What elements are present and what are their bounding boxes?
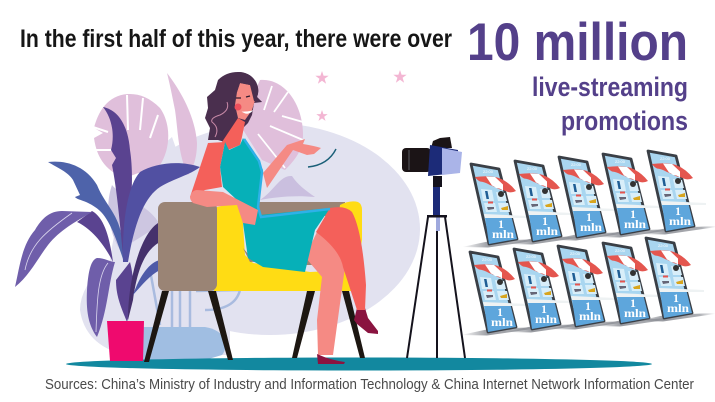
star	[393, 70, 407, 83]
phone: 1	[498, 219, 504, 231]
forearm	[190, 190, 258, 225]
phone: 22:00	[527, 166, 538, 171]
pink fan leaf left	[94, 94, 168, 178]
phone: 1	[585, 301, 591, 313]
pale blue base	[143, 327, 226, 360]
stars	[315, 70, 407, 121]
smile	[243, 111, 252, 113]
phone: mln	[624, 219, 647, 231]
seat shadow strip	[243, 248, 325, 265]
phone: 22:00	[526, 254, 537, 259]
pale stems and leaves under chair	[150, 270, 240, 327]
chair legs	[144, 291, 365, 362]
right arm yellow	[330, 201, 362, 291]
cheek	[234, 104, 242, 110]
phone: mln	[624, 308, 647, 320]
phone: 1	[673, 293, 679, 305]
phone: mln	[491, 317, 514, 329]
subheading: live-streaming: live-streaming	[532, 72, 688, 102]
front shoe	[317, 354, 345, 364]
tripod column	[433, 187, 440, 215]
potted plant	[15, 107, 200, 361]
chair back panel	[158, 202, 217, 291]
star	[315, 71, 329, 84]
leaf: purple top	[103, 107, 132, 255]
phone	[637, 238, 715, 322]
face	[235, 83, 256, 120]
headline number: 10 million: 10 million	[467, 13, 688, 72]
hair front strand	[232, 72, 262, 102]
raised arm	[263, 139, 321, 188]
phone	[505, 249, 583, 332]
phone: 1	[630, 298, 636, 310]
phone	[639, 151, 715, 234]
lilac low leaf	[260, 176, 315, 200]
crossed leg	[316, 207, 366, 310]
pink fan leaf right	[240, 80, 303, 170]
phone	[462, 164, 540, 248]
phone: 22:00	[660, 156, 671, 161]
screen	[442, 148, 462, 175]
phone	[594, 243, 672, 326]
phone: 22:00	[570, 251, 581, 256]
leaf: blue lower	[133, 260, 160, 295]
hair curl	[212, 102, 228, 137]
neck and chest	[222, 118, 245, 150]
phone: 22:00	[658, 243, 669, 248]
camera on tripod	[402, 137, 465, 358]
background blob	[80, 123, 420, 355]
phone: 1	[586, 212, 592, 224]
woman presenter	[190, 72, 378, 364]
phone: 22:00	[482, 257, 493, 262]
phone: mln	[579, 311, 602, 323]
phone: 1	[541, 304, 547, 316]
phone	[461, 252, 539, 336]
phone: 1	[675, 206, 681, 218]
hair back	[205, 72, 262, 143]
raised shoe	[354, 308, 378, 334]
phone	[594, 154, 672, 238]
dress	[220, 138, 330, 272]
phone: 22:00	[571, 162, 582, 167]
leaf: dark purple left	[77, 211, 113, 262]
leaf: blue right	[123, 163, 200, 262]
eyes	[236, 96, 250, 98]
subheading: promotions: promotions	[561, 106, 688, 136]
phone: 1	[497, 307, 503, 319]
tripod legs	[407, 217, 465, 358]
phone: 22:00	[615, 159, 626, 164]
phone: mln	[492, 229, 515, 241]
lens	[402, 148, 431, 172]
leaf: violet lower	[87, 258, 115, 337]
phone: 22:00	[615, 248, 626, 253]
pale background leaves	[93, 73, 315, 360]
yellow seat and arm	[214, 204, 354, 291]
phone: 1	[542, 216, 548, 228]
back leg	[305, 232, 345, 355]
phone: mln	[580, 222, 603, 234]
armchair	[144, 201, 365, 362]
phone: 1	[630, 209, 636, 221]
phone: 22:00	[483, 169, 494, 174]
motion arc	[308, 149, 336, 167]
dress trim	[244, 139, 330, 217]
floor	[66, 358, 652, 370]
lilac leaf behind plant	[108, 185, 160, 250]
phone	[550, 157, 628, 240]
title: first half statement: In the first half of this year, there were over	[20, 25, 452, 53]
star	[316, 110, 328, 121]
leaf: dark plum	[128, 223, 160, 320]
upper arm	[190, 142, 225, 197]
body	[428, 145, 458, 176]
phone	[549, 246, 627, 330]
phone: mln	[535, 314, 558, 326]
phone	[506, 161, 584, 244]
phone grid	[461, 151, 715, 336]
pot	[107, 321, 144, 361]
phone: mln	[536, 226, 559, 238]
leaf: blue left	[48, 162, 124, 262]
leaf: purple center	[116, 262, 133, 322]
phone: mln	[669, 216, 692, 228]
leaf: violet far left	[15, 211, 92, 287]
chair backrest strip	[250, 202, 345, 216]
top hump	[431, 137, 452, 148]
pink narrow leaf	[167, 73, 197, 175]
phone: mln	[667, 303, 690, 315]
